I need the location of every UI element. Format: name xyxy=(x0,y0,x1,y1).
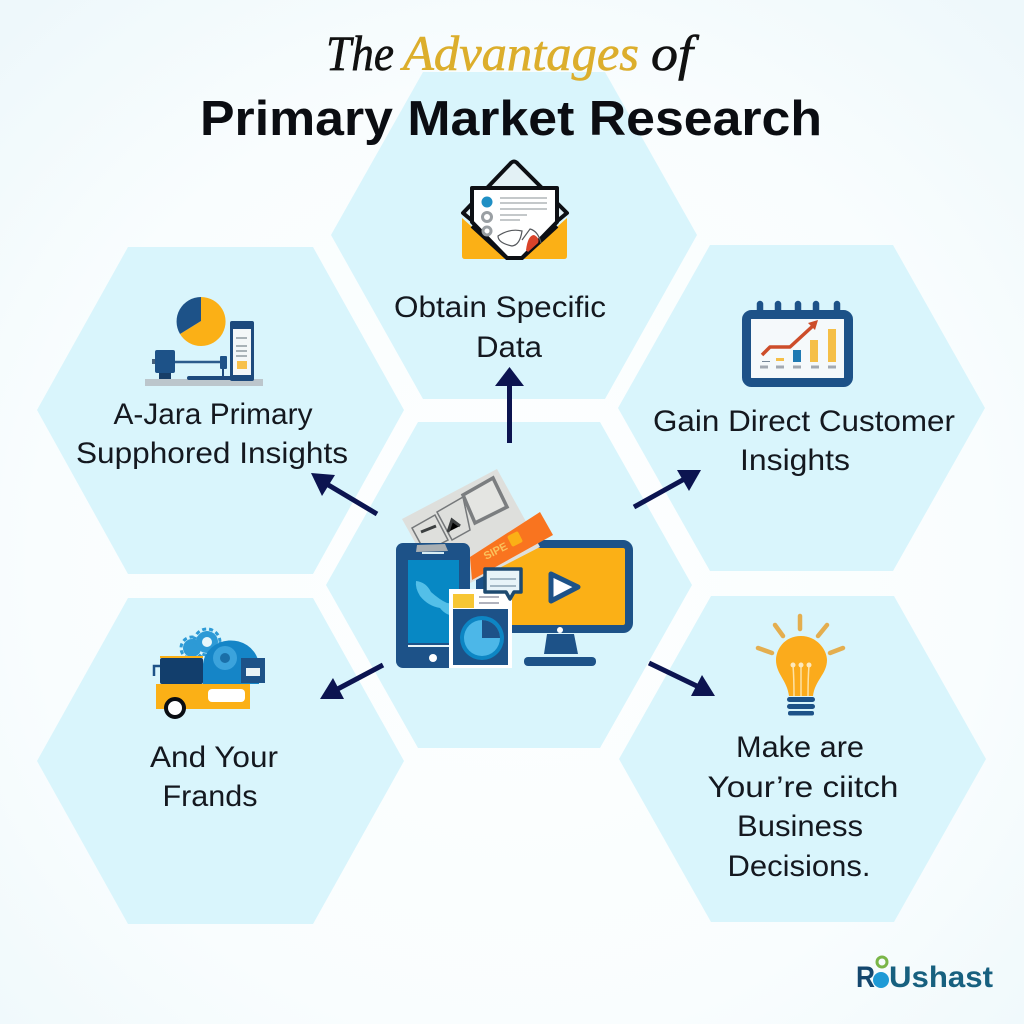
logo: Roushast: Ushast xyxy=(889,961,993,994)
arrow: center to lower right xyxy=(649,663,715,696)
label: make decisions: Make are xyxy=(736,731,864,764)
icon: orange ticket: SIPE xyxy=(482,541,510,563)
logo: Roushast: R xyxy=(856,961,875,994)
icon: gray photo card xyxy=(402,469,540,596)
label: obtain specific data: Obtain Specific xyxy=(394,291,606,324)
label: gain direct customer insights: Gain Direct Customer xyxy=(653,405,955,438)
icon: light bulb xyxy=(758,616,843,716)
label: and your frands xyxy=(150,741,278,813)
label: supported insights: A-Jara Primary xyxy=(114,398,312,431)
panel: lower left hexagon xyxy=(37,598,404,924)
icon: report with pie xyxy=(449,589,512,668)
label: and your frands: Frands xyxy=(162,780,258,813)
label: make decisions xyxy=(708,731,898,883)
panel: top hexagon xyxy=(331,72,697,399)
label: obtain specific data xyxy=(394,291,606,364)
title: of xyxy=(651,25,700,81)
icon: pie chart and phone device xyxy=(145,297,263,386)
icon: envelope with survey sheet xyxy=(462,162,567,259)
label: make decisions: Decisions. xyxy=(728,850,870,883)
panel: upper left hexagon xyxy=(37,247,404,574)
icon: smartphone xyxy=(396,543,470,668)
icon: speech bubble xyxy=(485,569,521,599)
label: make decisions: Your’re ciitch xyxy=(708,771,898,804)
label: make decisions: Business xyxy=(737,810,863,843)
label: gain direct customer insights xyxy=(653,405,955,477)
arrow: center to upper left xyxy=(311,473,377,514)
label: gain direct customer insights: Insights xyxy=(740,444,850,477)
icon: bus with gears xyxy=(154,629,265,717)
arrow: center to top xyxy=(495,367,524,443)
icon: calendar line and bar chart xyxy=(746,304,848,382)
icon: monitor xyxy=(480,544,629,666)
icon: center devices xyxy=(396,469,629,668)
logo: Roushast xyxy=(856,957,993,994)
label: obtain specific data: Data xyxy=(476,331,542,364)
panel: center hexagon xyxy=(326,422,692,748)
panel: lower right hexagon xyxy=(619,596,986,922)
title xyxy=(200,25,822,146)
label: supported insights xyxy=(76,398,348,470)
title: The xyxy=(326,25,394,81)
label: and your frands: And Your xyxy=(150,741,278,774)
title: Advantages xyxy=(400,25,639,81)
arrow: center to upper right xyxy=(634,470,701,507)
icon: orange ticket xyxy=(470,512,553,580)
title: Primary Market Research xyxy=(200,92,822,146)
arrow: center to lower left xyxy=(320,665,383,699)
label: supported insights: Supphored Insights xyxy=(76,437,348,470)
panel: upper right hexagon xyxy=(618,245,985,571)
